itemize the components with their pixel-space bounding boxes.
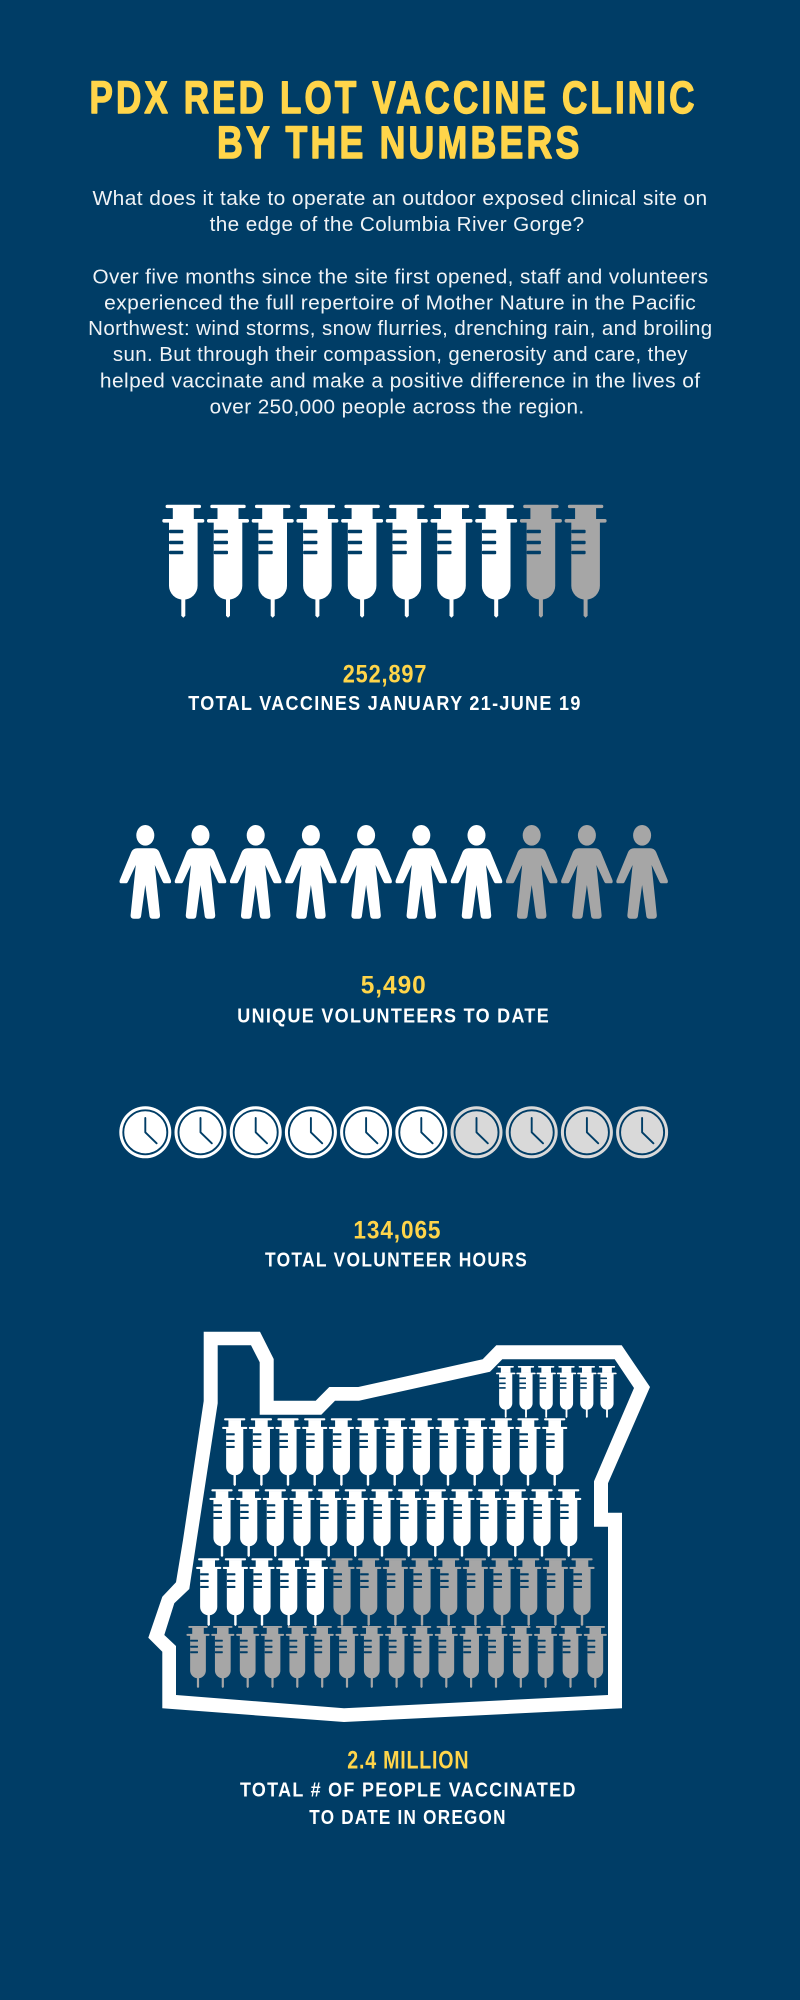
intro text: Northwest: wind storms, snow flurries, drenching rain, and broiling (88, 318, 713, 340)
intro text: sun. But through their compassion, generosity and care, they (113, 344, 688, 366)
intro text: experienced the full repertoire of Mother Nature in the Pacific (104, 292, 696, 314)
stat: total volunteer hours: 134,065 (353, 1216, 441, 1244)
stat: total vaccines (188, 660, 582, 715)
pictogram: clocks (119, 1106, 668, 1158)
stat: people vaccinated in Oregon: 2.4 MILLION (347, 1746, 469, 1774)
stat: total volunteer hours (265, 1216, 528, 1272)
stat: unique volunteers: UNIQUE VOLUNTEERS TO DATE (237, 1004, 550, 1027)
pictogram: syringes inside Oregon (186, 1366, 617, 1688)
stat: people vaccinated in Oregon (240, 1746, 577, 1829)
stat: people vaccinated in Oregon: TO DATE IN OREGON (309, 1806, 507, 1829)
intro text: Over five months since the site first opened, staff and volunteers (92, 266, 708, 288)
intro text: over 250,000 people across the region. (210, 396, 585, 418)
stat: unique volunteers (237, 971, 550, 1027)
map: Oregon outline (148, 1332, 650, 1722)
title: BY THE NUMBERS (217, 117, 582, 168)
stat: unique volunteers: 5,490 (361, 971, 427, 999)
pictogram: vaccines syringes (162, 505, 607, 618)
pictogram: volunteers people (120, 825, 668, 919)
stat: total vaccines: TOTAL VACCINES JANUARY 21-JUNE 19 (188, 692, 582, 715)
intro text (88, 188, 713, 418)
title (90, 72, 698, 168)
intro text: What does it take to operate an outdoor exposed clinical site on (92, 188, 708, 210)
stat: total volunteer hours: TOTAL VOLUNTEER HOURS (265, 1248, 528, 1272)
intro text: the edge of the Columbia River Gorge? (210, 214, 585, 236)
stat: people vaccinated in Oregon: TOTAL # OF PEOPLE VACCINATED (240, 1779, 577, 1802)
intro text: helped vaccinate and make a positive difference in the lives of (100, 370, 701, 392)
stat: total vaccines: 252,897 (343, 660, 427, 688)
